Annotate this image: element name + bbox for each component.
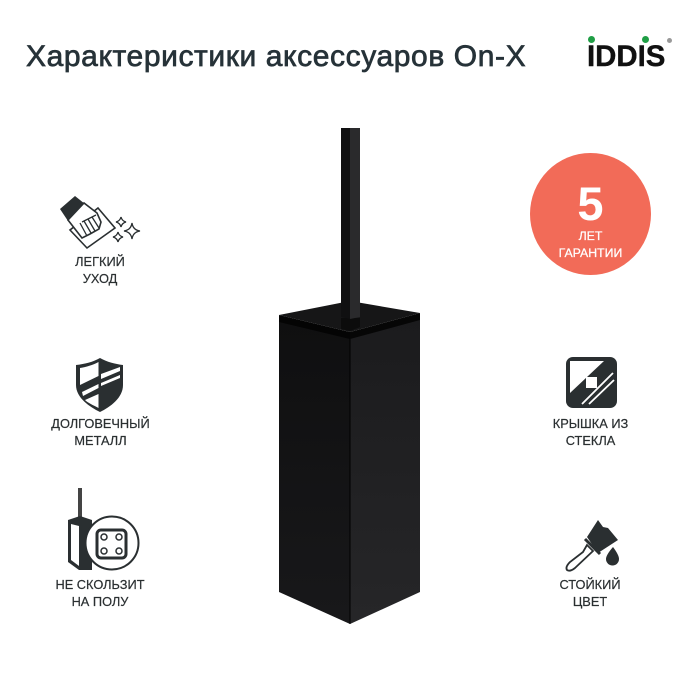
label: easy care: УХОД bbox=[83, 271, 117, 286]
icon: glass lid bbox=[566, 357, 617, 408]
label: easy care bbox=[75, 254, 125, 286]
label: non-slip bbox=[55, 577, 145, 609]
label: glass lid: КРЫШКА ИЗ bbox=[553, 416, 628, 431]
label: durable metal: МЕТАЛЛ bbox=[74, 433, 127, 448]
label: lasting color bbox=[559, 577, 621, 609]
icon: non-slip base bbox=[68, 488, 140, 570]
icon: durable metal shield bbox=[76, 358, 123, 412]
logo: IDDIS: IDDIS bbox=[587, 40, 665, 73]
badge: 5 year warranty: ГАРАНТИИ bbox=[559, 246, 622, 260]
title: Характеристики аксессуаров On-X bbox=[26, 40, 526, 73]
label: durable metal: ДОЛГОВЕЧНЫЙ bbox=[51, 416, 150, 431]
label: easy care: ЛЕГКИЙ bbox=[75, 254, 125, 269]
label: glass lid bbox=[553, 416, 628, 448]
label: durable metal bbox=[51, 416, 150, 448]
label: lasting color: СТОЙКИЙ bbox=[559, 577, 621, 592]
label: non-slip: НЕ СКОЛЬЗИТ bbox=[55, 577, 145, 592]
badge: 5 year warranty: 5 bbox=[577, 177, 604, 230]
badge: 5 year warranty bbox=[530, 153, 651, 275]
label: glass lid: СТЕКЛА bbox=[566, 433, 615, 448]
icon: paint brush and drop bbox=[566, 520, 619, 572]
label: lasting color: ЦВЕТ bbox=[573, 594, 607, 609]
badge: 5 year warranty: ЛЕТ bbox=[579, 229, 602, 243]
icon: easy care bbox=[60, 196, 140, 249]
label: non-slip: НА ПОЛУ bbox=[72, 594, 128, 609]
